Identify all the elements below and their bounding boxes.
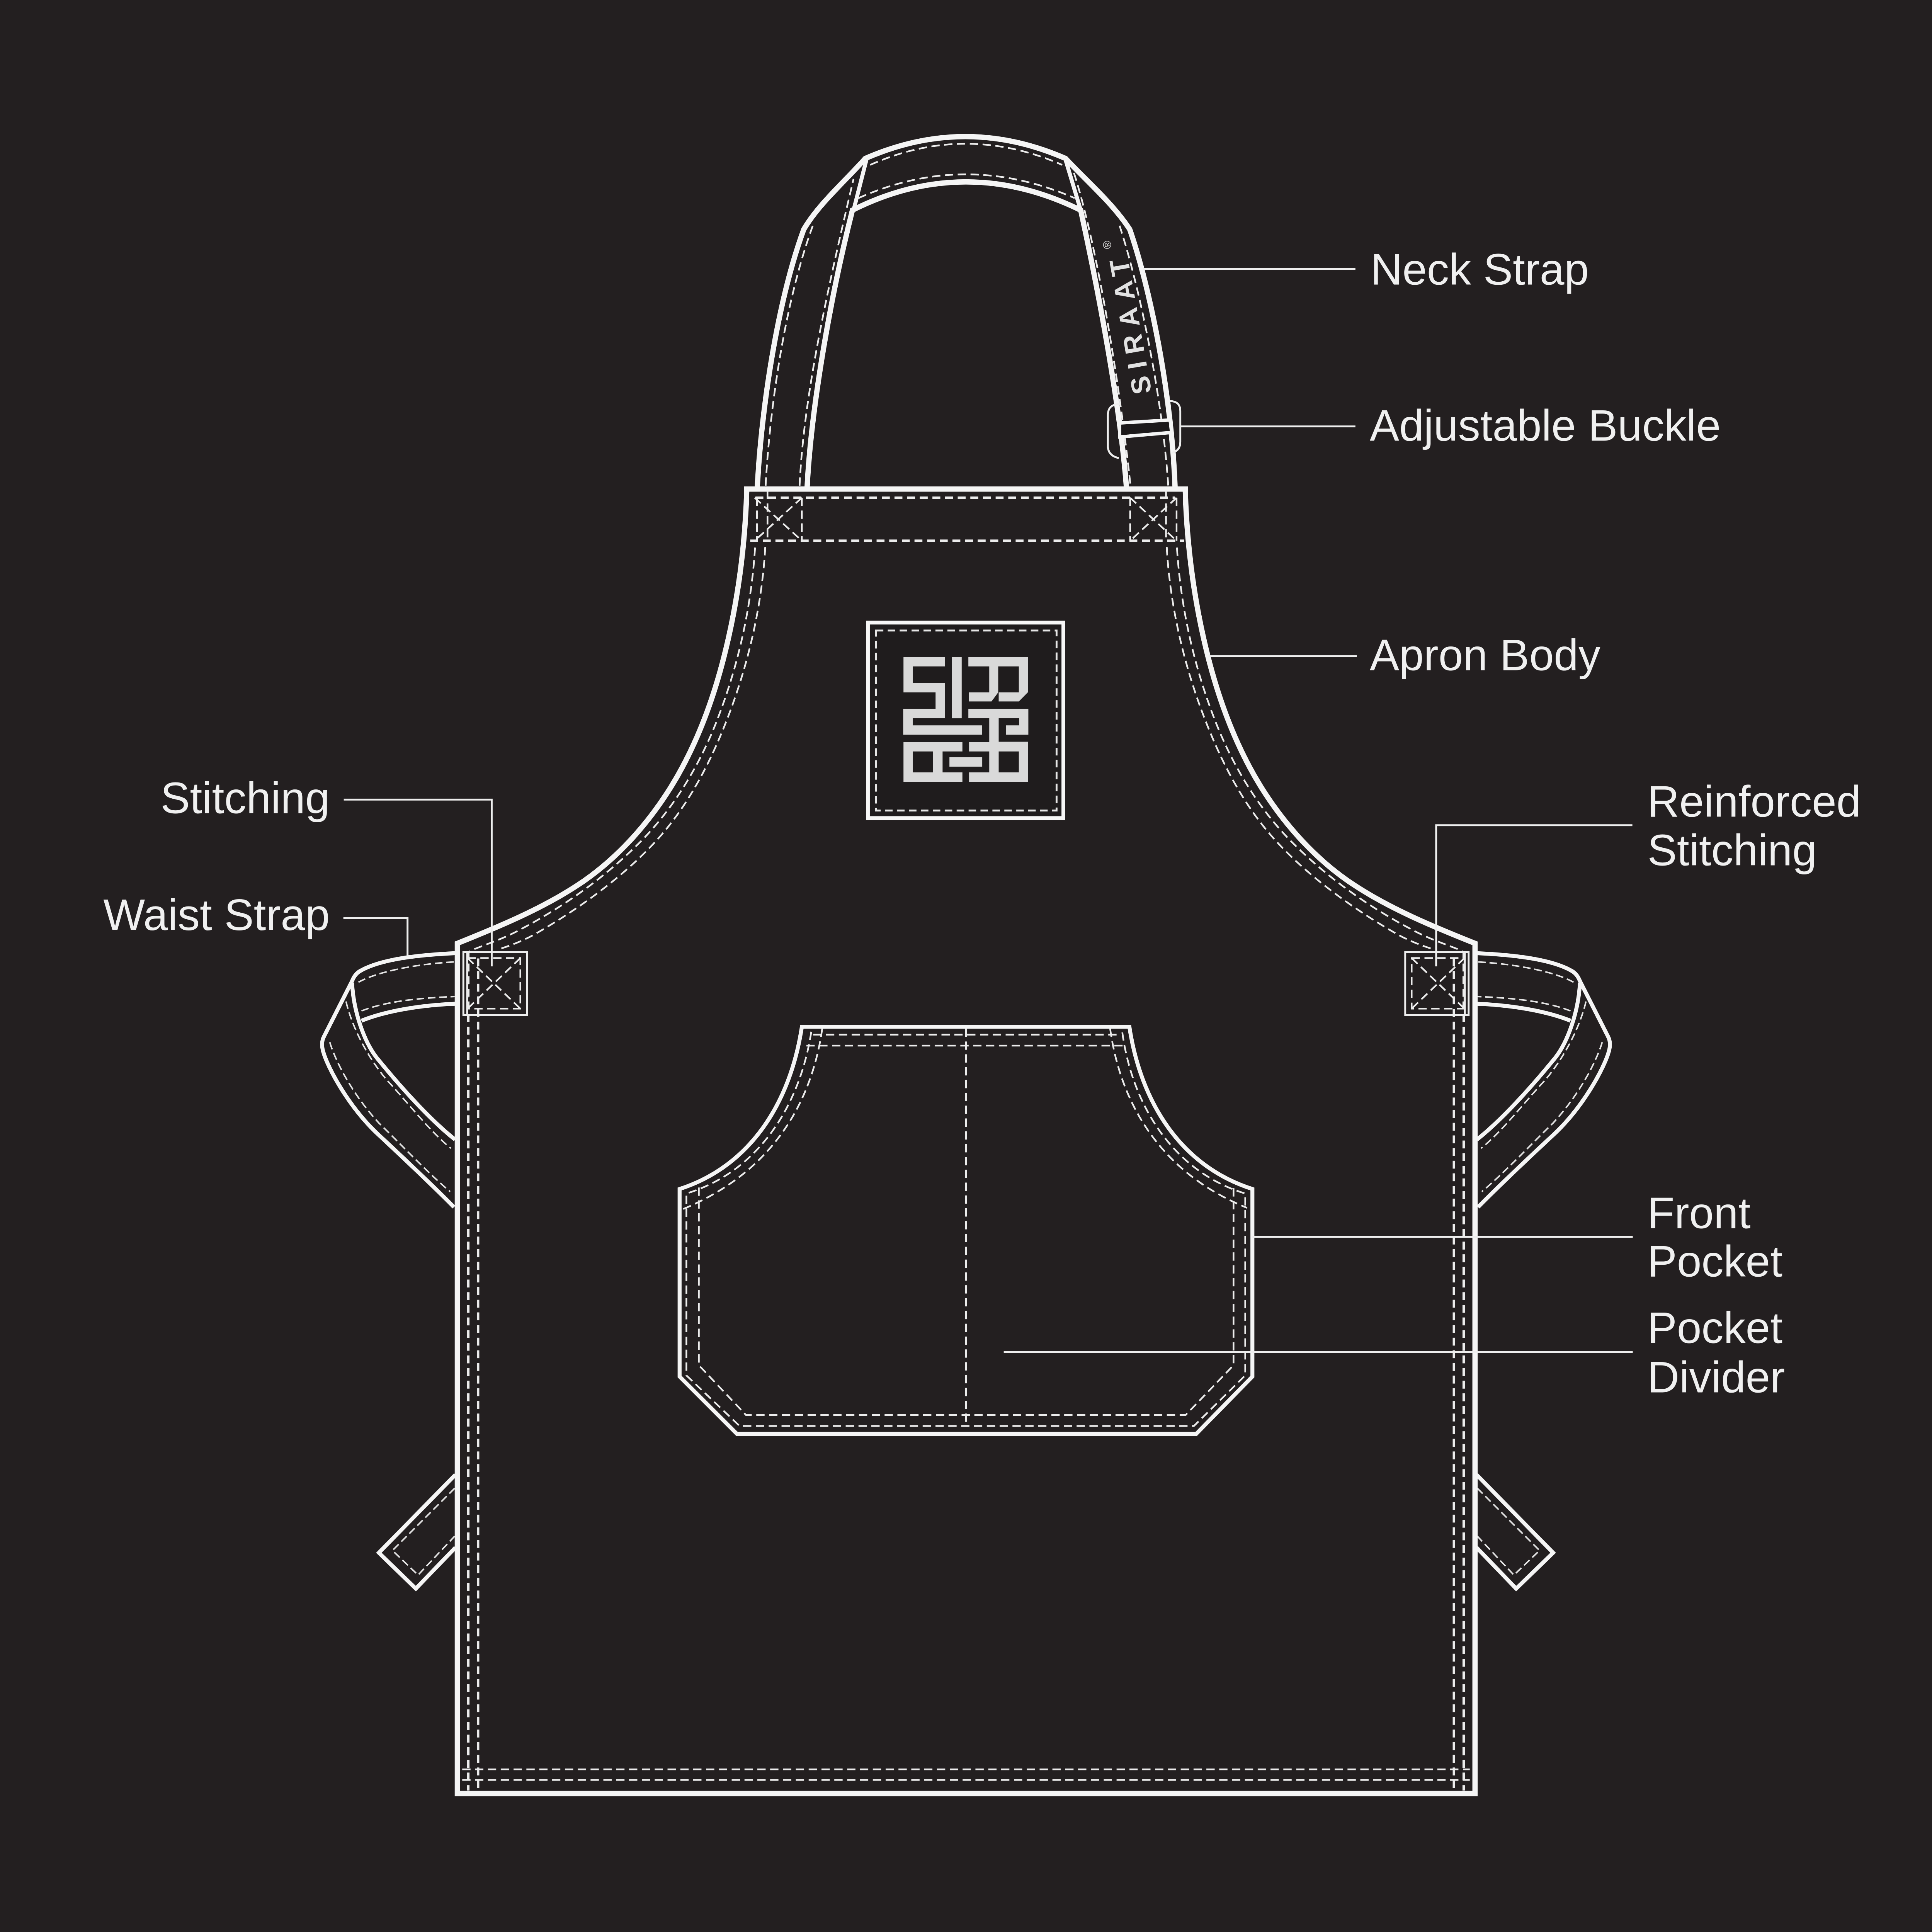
leader: neck strap <box>1143 268 1355 270</box>
label: pocket divider: Pocket <box>1648 1304 1782 1353</box>
leader: stitching <box>344 799 492 966</box>
leader: apron body <box>1209 655 1357 657</box>
label: apron body: Apron Body <box>1370 631 1600 680</box>
side and armhole stitching <box>462 547 1470 1791</box>
label: neck strap: Neck Strap <box>1371 245 1589 294</box>
leader: pocket divider <box>1004 1351 1633 1353</box>
front pocket <box>680 1027 1252 1434</box>
leader: front pocket <box>1252 1236 1633 1238</box>
adjustable buckle <box>1108 401 1180 458</box>
lower tie: left <box>379 1475 456 1588</box>
leader: waist strap <box>344 918 408 957</box>
brand text on strap: ® <box>1100 240 1114 250</box>
neck strap <box>757 137 1175 487</box>
brand text on strap: SIRAAT <box>1102 249 1157 397</box>
reinforced box stitch: right <box>1405 952 1469 1015</box>
leader: reinforced stitching <box>1436 825 1633 966</box>
waist strap: right <box>1476 953 1610 1207</box>
pocket divider <box>965 1029 967 1426</box>
top hem stitching <box>750 491 1184 541</box>
label: front pocket: Pocket <box>1648 1237 1782 1286</box>
leader: adjustable buckle <box>1180 425 1355 427</box>
logo mark <box>903 657 1028 782</box>
armhole stitch: right <box>1167 547 1462 951</box>
label: waist strap: Waist Strap <box>103 891 330 940</box>
label: stitching: Stitching <box>160 774 330 823</box>
label: reinforced stitching: Stitching <box>1648 826 1817 875</box>
reinforced box stitch: left <box>463 952 527 1015</box>
label: reinforced stitching: Reinforced <box>1648 777 1861 826</box>
label: adjustable buckle: Adjustable Buckle <box>1370 401 1721 451</box>
apron body outline <box>457 489 1475 1794</box>
lower tie: right <box>1476 1475 1553 1588</box>
logo patch <box>868 622 1063 818</box>
waist strap: left <box>322 953 456 1207</box>
label: pocket divider: Divider <box>1648 1353 1785 1402</box>
armhole stitch: left <box>470 547 765 951</box>
label: front pocket: Front <box>1648 1189 1750 1238</box>
